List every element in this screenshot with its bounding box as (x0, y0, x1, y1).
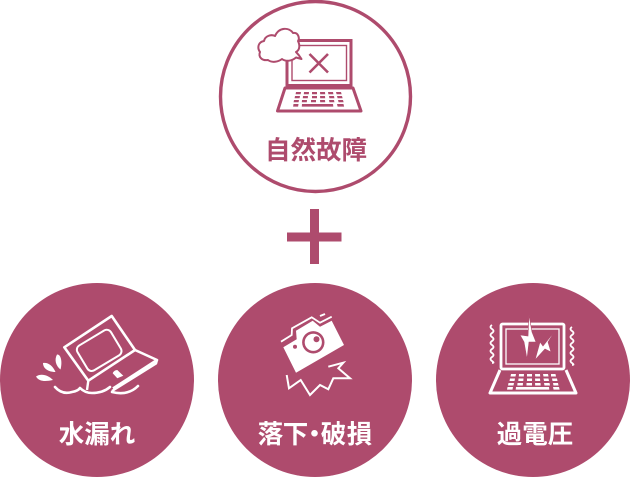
label: 下 (283, 421, 308, 449)
icon: laptop with lightning (490, 315, 576, 393)
label: 自然故障 (265, 137, 367, 165)
plus sign (287, 209, 342, 264)
label: 破 (321, 421, 346, 449)
label: ・ (302, 421, 327, 449)
icon: falling camera (281, 314, 350, 395)
circle outline (220, 2, 410, 192)
icon: tilted laptop in water (36, 316, 157, 393)
label: 落 (258, 421, 284, 449)
panel: natural failure (220, 2, 410, 192)
touchpad (113, 370, 123, 378)
panel: overvoltage (436, 283, 630, 477)
panel: water leak (0, 283, 194, 477)
label: 過電圧 (497, 421, 573, 449)
panel: drop and damage (218, 283, 412, 477)
water drops (36, 354, 61, 381)
icon: laptop with X and speech cloud (258, 29, 361, 111)
label: 水漏れ (59, 421, 135, 449)
label: 損 (347, 421, 372, 449)
